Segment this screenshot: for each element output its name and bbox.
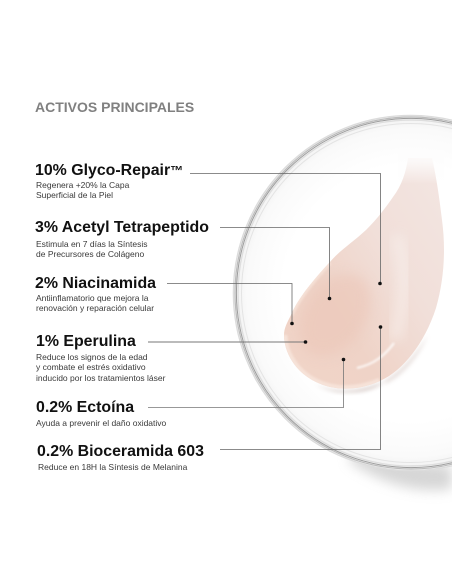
text: Eperulina: Reduce los signos de la edad [36,352,148,362]
callout line: Niacinamida [167,284,294,325]
text: Niacinamida: Antiinflamatorio que mejora la [36,293,148,303]
text: Eperulina: inducido por los tratamientos láser [36,373,165,383]
heading: Ectoina: 0.2% Ectoína [36,399,134,416]
heading: Acetyl Tetrapeptido: 3% Acetyl Tetrapeptido [35,219,209,236]
text: Glyco-Repair [36,180,130,200]
callout line: Ectoina [148,358,345,408]
callout line: Glyco-Repair [190,174,382,285]
petri dish [233,115,452,471]
dish shadow [350,452,452,490]
callout line: Eperulina [148,340,307,344]
text: Acetyl Tetrapeptido: de Precursores de Colágeno [36,249,144,259]
text: Glyco-Repair: Superficial de la Piel [36,190,113,200]
illustration: petri dish with cream and callout lines [148,114,452,496]
title: ACTIVOS PRINCIPALES [35,99,194,115]
text: Bioceramida: Reduce en 18H la Síntesis de Melanina [38,462,187,472]
text: Niacinamida [36,293,154,313]
text: Eperulina [36,352,166,383]
heading: Eperulina: 1% Eperulina [36,333,136,350]
heading: Niacinamida: 2% Niacinamida [35,275,156,292]
callout line: Acetyl Tetrapeptido [220,228,331,300]
text: Eperulina: y combate el estrés oxidativo [36,362,146,372]
text: Acetyl Tetrapeptido: Estimula en 7 días la Síntesis [36,239,148,249]
heading: Bioceramida: 0.2% Bioceramida 603 [37,443,204,460]
text: Niacinamida: renovación y reparación celular [36,303,154,313]
text: Acetyl Tetrapeptido [36,239,148,259]
heading: Glyco-Repair: 10% Glyco-Repair™ [35,162,183,179]
callout line: Bioceramida [220,325,382,450]
cream swatch [284,150,444,392]
text: Ectoina: Ayuda a prevenir el daño oxidativo [36,418,166,428]
text: Glyco-Repair: Regenera +20% la Capa [36,180,129,190]
